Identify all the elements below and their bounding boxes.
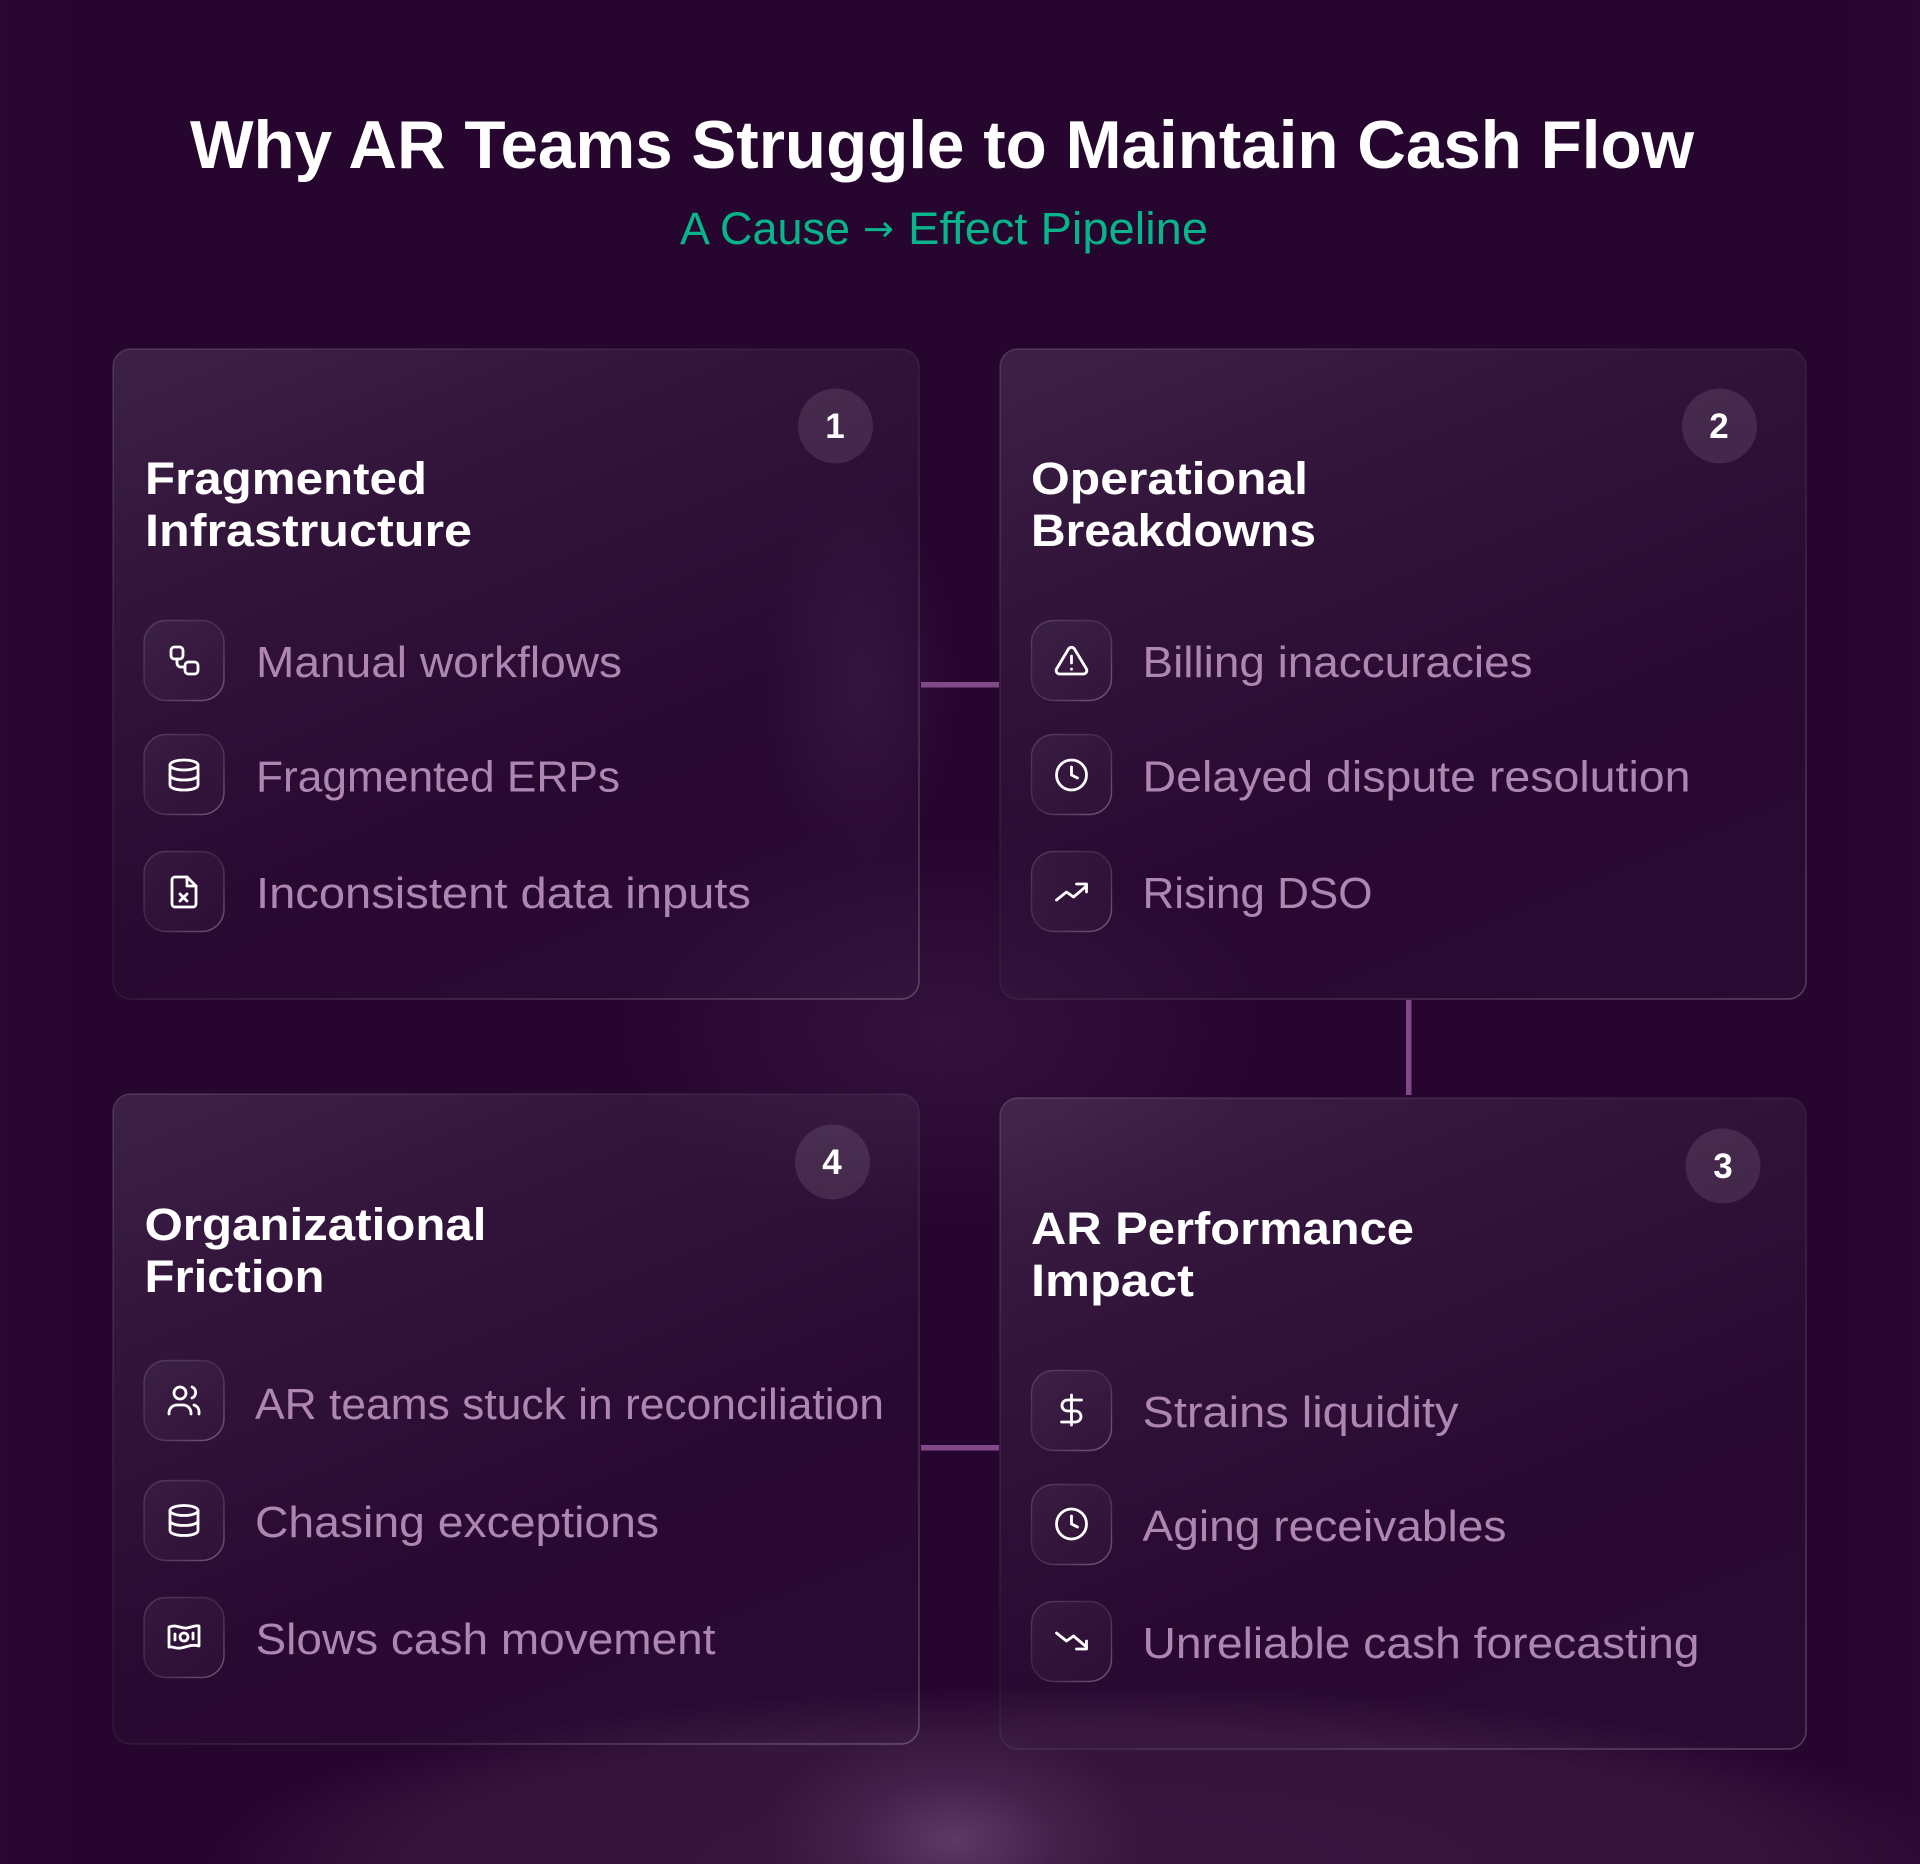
connector: card 1 to card 2 [921,682,999,688]
subtitle: Effect Pipeline [908,203,1208,254]
heading: Friction [144,1251,324,1302]
item: Slows cash movement [144,1598,716,1678]
badge 3 [1686,1128,1760,1204]
heading: Organizational [144,1199,486,1250]
connector: card 2 to card 3 [1406,1000,1412,1095]
heading: Breakdowns [1031,505,1316,556]
item: Strains liquidity: Strains liquidity [1142,1388,1458,1437]
panel: Fragmented Infrastructure [113,349,919,999]
badge 2 [1682,388,1757,464]
item: Strains liquidity [1032,1370,1458,1450]
item: Fragmented ERPs [144,734,620,814]
item: Aging receivables [1032,1484,1506,1564]
badge 3: 3 [1713,1147,1733,1186]
item: Manual workflows [144,620,622,700]
item: Slows cash movement: Slows cash movement [256,1615,716,1664]
subtitle: A Cause [680,203,850,254]
item: Billing inaccuracies [1032,620,1532,700]
panel: Organizational Friction [113,1094,919,1744]
item: Delayed dispute resolution: Delayed dispute resolution [1142,752,1690,802]
item: AR teams stuck in reconciliation: AR teams stuck in reconciliation [255,1380,884,1429]
connector: card 3 to card 4 [921,1445,999,1450]
item: Unreliable cash forecasting [1032,1602,1700,1682]
heading: Impact [1031,1255,1194,1306]
item: Inconsistent data inputs: Inconsistent data inputs [256,869,751,918]
item: Delayed dispute resolution [1032,734,1690,814]
item: Fragmented ERPs: Fragmented ERPs [256,752,620,802]
heading: AR Performance [1031,1203,1414,1254]
item: AR teams stuck in reconciliation [144,1360,884,1440]
item: Chasing exceptions: Chasing exceptions [255,1498,659,1547]
item: Chasing exceptions [144,1480,659,1560]
badge 1: 1 [825,407,845,446]
panel: AR Performance Impact [1000,1098,1806,1749]
title: Why AR Teams Struggle to Maintain Cash Flow [190,107,1695,183]
badge 4: 4 [822,1143,842,1182]
subtitle: → [863,209,894,250]
item: Rising DSO [1032,852,1372,932]
item: Billing inaccuracies: Billing inaccuracies [1142,638,1532,687]
panel: Operational Breakdowns [1000,349,1806,999]
heading: Infrastructure [145,505,472,556]
heading: Operational [1031,453,1308,504]
badge 1 [798,388,873,464]
heading: Fragmented [145,453,427,504]
item: Unreliable cash forecasting: Unreliable cash forecasting [1142,1619,1700,1668]
item: Aging receivables: Aging receivables [1142,1502,1506,1551]
item: Inconsistent data inputs [144,852,751,932]
item: Manual workflows: Manual workflows [256,638,622,687]
badge 4 [795,1124,870,1200]
badge 2: 2 [1709,407,1729,446]
item: Rising DSO: Rising DSO [1142,869,1372,918]
